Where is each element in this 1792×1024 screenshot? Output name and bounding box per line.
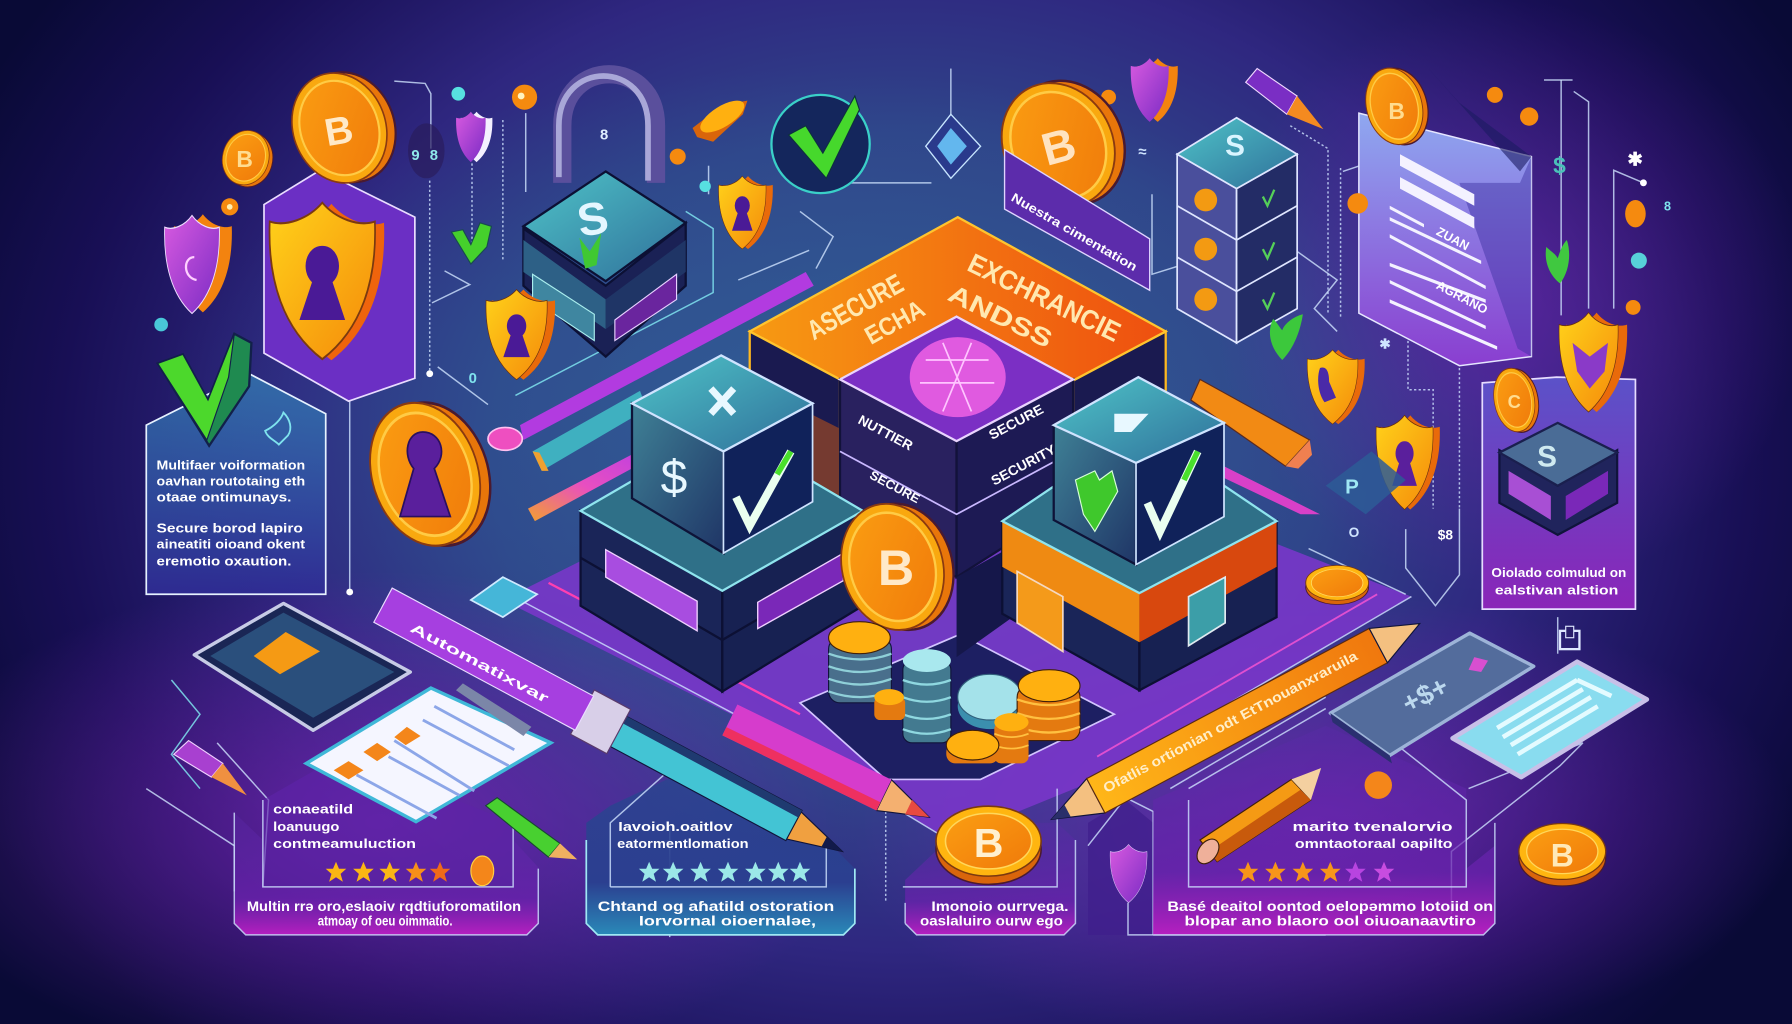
box: left cube: $ <box>661 452 687 505</box>
pen: orange diagonal pencil: Ofatlis ortionian odt EtTnouanxraruila <box>1101 648 1360 796</box>
title text: ASECURE <box>802 268 909 346</box>
tile: teal screen near left base <box>471 577 537 617</box>
icon: orange dot by document <box>1347 193 1368 214</box>
title text: ECHA <box>860 295 930 350</box>
icon: small lock tag <box>1560 626 1579 649</box>
title text <box>802 247 1126 354</box>
icon: purple pencil top <box>1246 69 1323 129</box>
title text: ANDSS <box>944 280 1057 354</box>
icon: small gear and dollar marks: O <box>1349 525 1360 540</box>
panel: top-left hexagon <box>264 170 415 401</box>
coin: keyhole <box>352 385 508 563</box>
icon: floating symbols: 8 <box>430 148 438 164</box>
card text: aineatiti oioand okent <box>157 538 306 552</box>
card 1 text: atmoay of oeu oimmatio. <box>318 914 453 929</box>
icon: shield mid-right 2 <box>1376 415 1440 509</box>
icon: card heart mark <box>265 413 290 445</box>
icon: small gear and dollar marks <box>1349 149 1643 542</box>
icon: gold nugget <box>693 95 749 142</box>
icon: padlock box <box>523 74 686 357</box>
coin: top doc: B <box>1388 98 1405 124</box>
card 4 text: omntaotoraal oapilto <box>1295 837 1453 851</box>
coin: flat small right <box>1306 565 1369 604</box>
box labels: SECURE <box>986 402 1046 443</box>
device: dark phone: +$+ <box>1397 670 1453 719</box>
panel: nuestra cimentation label <box>1005 150 1150 290</box>
panel: bottom card 4 <box>1153 697 1495 935</box>
rating stars <box>326 862 450 882</box>
coin: top doc <box>1358 60 1436 152</box>
document text lines <box>1390 154 1497 350</box>
small box: S <box>1537 440 1557 473</box>
card 1 text: loanuugo <box>273 820 340 834</box>
box labels: SECURITY <box>989 442 1058 488</box>
icon: floating symbols: ≈ <box>1138 145 1146 161</box>
icons: small dots <box>154 85 1647 331</box>
panel: translucent document: ZUAN <box>1434 225 1471 253</box>
icon: floating symbols: 0 <box>469 371 477 387</box>
box: left base <box>581 429 863 691</box>
device: dark phone <box>1330 633 1534 763</box>
orange pin <box>1365 771 1392 799</box>
card 2 text: eatormentlomation <box>617 837 749 851</box>
coin: large top centre-right <box>980 59 1146 229</box>
coin: large top centre-right: B <box>1036 118 1081 176</box>
coin: right card: C <box>1508 391 1521 412</box>
box: purple central box <box>840 317 1073 657</box>
panel: bottom card 1 <box>234 754 538 935</box>
card 4 text <box>1167 820 1493 929</box>
device: light phone <box>1453 662 1647 777</box>
connector lines <box>146 69 1647 937</box>
coin: central bitcoin <box>827 489 968 645</box>
disc: teal <box>958 674 1022 729</box>
icon: small gear and dollar marks: $8 <box>1438 527 1453 542</box>
coin: central bitcoin: B <box>878 539 914 596</box>
pen: pink pencil <box>722 705 937 833</box>
stack: orange narrow <box>994 713 1029 763</box>
flat: orange <box>946 730 999 763</box>
card 1 text: contmeamuluction <box>273 837 416 851</box>
icon: floating symbols: 8 <box>1664 199 1671 213</box>
card 1 text: Multin rrə oro,eslaoiv rqdtiuforomatilon <box>247 899 521 914</box>
coin: bottom right flat <box>1519 823 1606 886</box>
panel: right small box card: ealstivan alstion <box>1495 583 1618 597</box>
icon: teal bar <box>533 391 647 471</box>
stack: teal centre <box>903 649 951 743</box>
icon: orange magenta stick <box>528 451 642 521</box>
box labels: NUTTIER <box>856 412 915 453</box>
panel: right small box card: Oiolado colmulud on <box>1491 566 1626 580</box>
box labels: SECURE <box>867 468 922 506</box>
icon: server stack <box>1177 118 1297 343</box>
pen: small purple pencil <box>174 741 247 795</box>
card 3 text line 2: oaslaluiro ourw ego <box>920 914 1063 929</box>
icon: small green check <box>451 223 491 264</box>
pen: gold pencil panel 4 <box>1193 768 1321 868</box>
card 2 text <box>598 820 834 929</box>
coin: bottom flat bitcoin <box>936 806 1041 884</box>
pen: orange diagonal pencil <box>1042 606 1429 837</box>
icon: bottom purple shield <box>1088 798 1326 935</box>
panel: translucent document <box>1359 69 1531 366</box>
box: big orange central box <box>750 217 1166 514</box>
panel: bottom card 3 <box>886 789 1075 935</box>
icon: purple shield left <box>165 214 232 314</box>
rating stars <box>1238 862 1394 882</box>
card 2 text: Chtand og aɦatild ostoration <box>598 899 834 914</box>
icon: floating symbols: 8 <box>600 127 608 143</box>
stack: teal with gold top <box>829 622 891 703</box>
isometric floor platform <box>503 491 1411 840</box>
pen: green pencil <box>486 798 577 859</box>
icon: big shield right <box>1559 313 1627 412</box>
card 1 text: conaeatild <box>273 803 353 817</box>
panel: bottom card 2 <box>586 760 855 935</box>
card text: eremotio oxaution. <box>157 555 291 569</box>
tile: teal icon plaque: P <box>1345 476 1359 499</box>
card 4 text: Basé deaitol oontod oelopəmmo lotoiid on <box>1167 899 1493 914</box>
pen: purple banner with teal barrel: Automatixvar <box>408 620 552 706</box>
box: right base <box>1002 429 1277 690</box>
icon: large green check <box>158 334 251 446</box>
panel: translucent document: AGRANO <box>1434 278 1490 317</box>
panel: nuestra cimentation label: Nuestra cimentation <box>1009 190 1140 274</box>
icon: shield top centre <box>719 176 773 249</box>
icon: floating symbols: 9 <box>411 148 420 164</box>
orange pin <box>471 856 494 886</box>
stack: orange small left <box>874 689 905 720</box>
icon: ring check <box>771 95 870 193</box>
box labels <box>856 402 1058 506</box>
coin: large top-left: B <box>321 108 356 155</box>
stack: orange large <box>1017 670 1080 741</box>
card 2 text: Iorvornal oioernaləe, <box>639 914 816 929</box>
panel: right small box card <box>1482 377 1635 609</box>
icon: magenta thin pencil <box>1206 457 1320 514</box>
icon: green leaf centre-right <box>1270 314 1303 360</box>
card 4 text: blopar ano blaoro ool oiuoanaavtiro <box>1185 914 1476 929</box>
clipboard with list <box>306 683 551 822</box>
icon: orange shield near padlock <box>486 290 555 380</box>
panel: blue verification card <box>146 374 326 594</box>
card 1 text <box>247 803 521 929</box>
coin: large top-left <box>277 57 411 199</box>
box: left cube <box>632 355 813 553</box>
coin: small top-left: B <box>236 146 253 172</box>
small box <box>1499 423 1617 535</box>
coin: bottom right flat: B <box>1551 837 1574 873</box>
coin stacks <box>829 622 1080 763</box>
tile: teal icon plaque <box>1326 451 1406 514</box>
icon: shield mid-right 1 <box>1307 350 1365 424</box>
coin: small top-left <box>216 125 279 192</box>
icon: magenta lollipop line <box>488 272 814 450</box>
icon: diamond tile <box>926 114 981 178</box>
icon: small purple shield <box>456 112 492 162</box>
icon: small gear and dollar marks: ✱ <box>1627 149 1643 170</box>
icon: small gear and dollar marks: ✱ <box>1379 337 1391 352</box>
card text: oavhan routotaing eth <box>157 475 305 489</box>
card text <box>157 459 306 569</box>
card 4 text: marito tvenalorvio <box>1293 820 1453 834</box>
icon: small gear and dollar marks: $ <box>1553 153 1566 179</box>
device: tablet left <box>194 603 410 730</box>
icon: padlock box: S <box>573 191 612 247</box>
coin: bottom flat bitcoin: B <box>974 820 1003 866</box>
card 2 text: Iavoioh.oaitlov <box>618 820 733 834</box>
title text: EXCHRANCIE <box>963 247 1126 348</box>
box: right cube <box>1054 377 1224 565</box>
pen: purple banner with teal barrel <box>371 583 854 874</box>
coin: right card <box>1489 364 1543 436</box>
rating stars <box>639 862 810 882</box>
card text: otaae ontimunays. <box>157 491 291 505</box>
card text: Secure borod lapiro <box>157 522 303 536</box>
icon: large yellow shield <box>270 203 384 360</box>
icon: server stack: S <box>1225 129 1245 162</box>
icon: green leaf right <box>1546 240 1569 283</box>
card text: Multifaer voiformation <box>157 459 305 473</box>
card 3 text: Imonoio ourrvega. <box>931 899 1069 914</box>
icon: orange pencil centre-right <box>1191 379 1312 469</box>
icon: floating symbols <box>408 123 1671 387</box>
icon: purple shield top <box>1131 58 1178 122</box>
